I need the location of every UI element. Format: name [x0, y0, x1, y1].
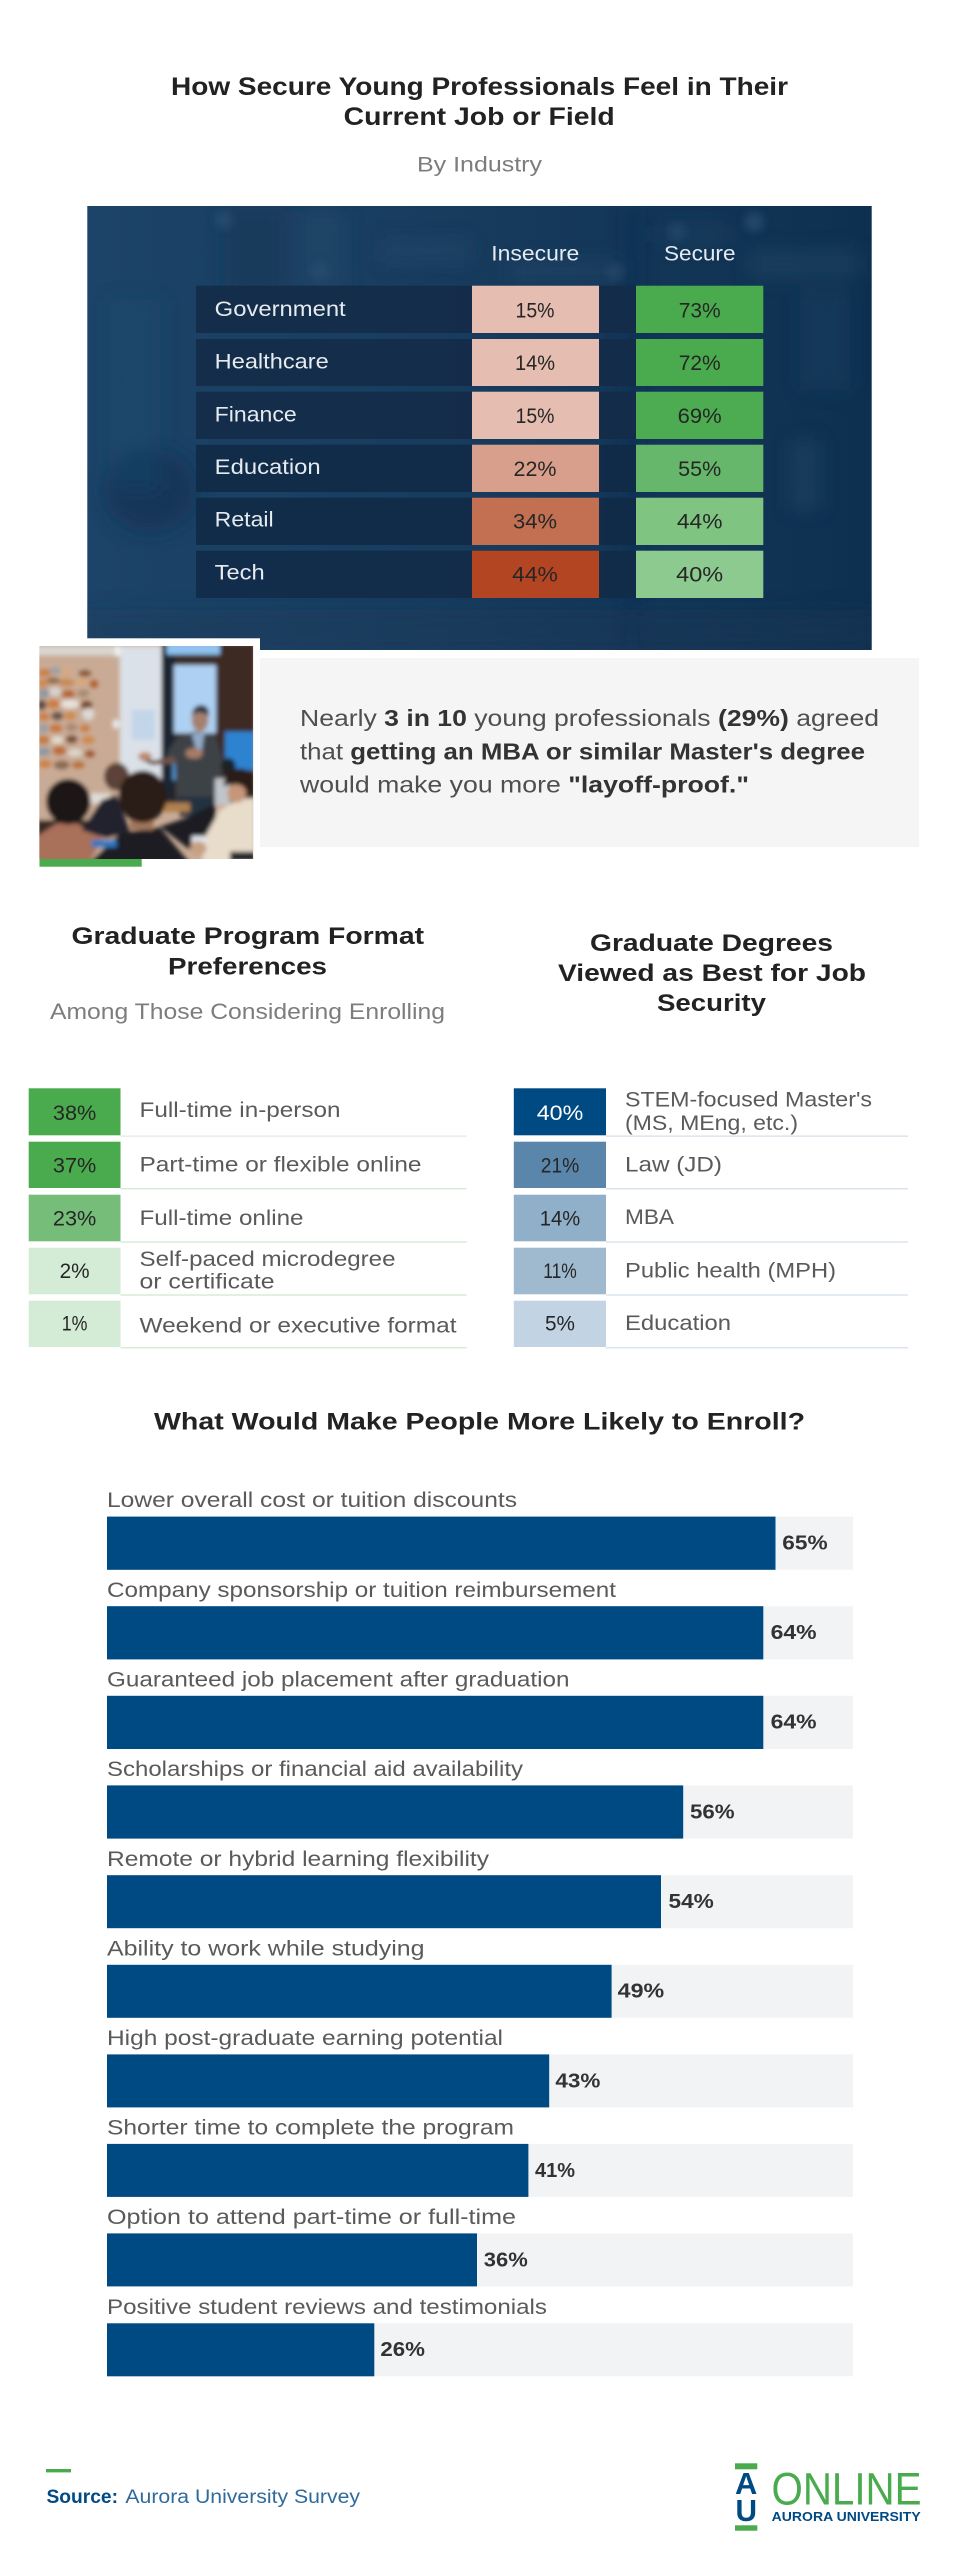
row: tech: Tech: [215, 561, 265, 584]
bar: earning potential 43%: High post-graduate earning potential: [107, 2027, 503, 2050]
bar: scholarships 56%: [107, 1758, 853, 1839]
bar: student reviews 26%: Positive student reviews and testimonials: [107, 2296, 547, 2319]
subtitle: among those considering enrolling: Among Those Considering Enrolling: [50, 999, 445, 1024]
item: mba 14%: MBA: [625, 1206, 674, 1229]
heading: graduate program format preferences: Preferences: [168, 954, 327, 981]
heading: graduate degrees best for job security: [558, 930, 866, 1017]
row: government: [196, 286, 763, 333]
bar: part-time or full-time 36%: Option to attend part-time or full-time: [107, 2206, 516, 2229]
bar: shorter time 41%: 41%: [535, 2160, 575, 2182]
bar chart: enrollment motivators: [107, 1489, 853, 2376]
row: government: 73%: [679, 299, 721, 322]
row: finance: Finance: [215, 403, 297, 426]
heading: job security by industry: [171, 73, 788, 131]
collage wall: [37, 667, 119, 770]
row: retail: 44%: [677, 511, 722, 534]
bar: student reviews 26%: 26%: [380, 2339, 425, 2361]
item: self-paced microdegree 2%: Self-paced microdegree: [140, 1248, 396, 1271]
bar: guaranteed job placement 64%: [107, 1669, 853, 1749]
bar: lower cost 65%: [107, 1489, 853, 1570]
bar: company sponsorship 64%: [107, 1579, 853, 1659]
item: part-time or flexible online 37%: 37%: [53, 1155, 96, 1178]
row: healthcare: Healthcare: [215, 351, 329, 374]
heading: job security by industry: Current Job or Field: [344, 103, 615, 131]
bar: scholarships 56%: Scholarships or financial aid availability: [107, 1758, 524, 1781]
bar: remote or hybrid 54%: 54%: [668, 1891, 714, 1913]
panel: industry security table: [87, 206, 872, 650]
bar: part-time or full-time 36%: 36%: [484, 2249, 528, 2271]
row: tech: 44%: [512, 564, 558, 587]
item: full-time in-person 38%: [29, 1088, 467, 1137]
item: mba 14%: 14%: [540, 1207, 580, 1230]
item: stem-focused master's 40%: (MS, MEng, etc.): [625, 1112, 798, 1135]
bar: guaranteed job placement 64%: Guaranteed job placement after graduation: [107, 1669, 570, 1692]
row: education: 22%: [514, 458, 556, 481]
row: retail: 34%: [513, 511, 557, 534]
heading: graduate degrees best for job security: Viewed as Best for Job: [558, 960, 866, 987]
row: retail: Retail: [215, 509, 274, 532]
item: stem-focused master's 40%: STEM-focused Master's: [625, 1089, 872, 1112]
row: tech: 40%: [676, 564, 723, 587]
callout: layoff-proof stat: that getting an MBA or similar Master's degree: [300, 738, 865, 764]
bar: earning potential 43%: 43%: [555, 2070, 601, 2092]
bar: lower cost 65%: Lower overall cost or tuition discounts: [107, 1489, 517, 1512]
row: education: [196, 445, 763, 492]
row: education: 55%: [678, 458, 721, 481]
audience: [37, 758, 255, 863]
item: public health 11%: Public health (MPH): [625, 1259, 836, 1282]
source note: Source:: [46, 2487, 118, 2508]
bar: company sponsorship 64%: 64%: [771, 1622, 817, 1644]
item: education 5%: Education: [625, 1312, 731, 1335]
callout: layoff-proof stat: would make you more "layoff-proof.": [299, 772, 749, 798]
bar: guaranteed job placement 64%: 64%: [771, 1712, 817, 1734]
logo: Aurora University Online: ONLINE: [772, 2463, 922, 2514]
item: stem-focused master's 40%: [514, 1088, 908, 1137]
logo: Aurora University Online: [735, 2463, 922, 2531]
item: self-paced microdegree 2%: [29, 1248, 467, 1296]
item: law 21%: [514, 1142, 908, 1190]
bar: scholarships 56%: 56%: [690, 1801, 735, 1823]
logo: Aurora University Online: U: [736, 2493, 757, 2528]
item: full-time online 23%: Full-time online: [140, 1207, 304, 1230]
item: self-paced microdegree 2%: 2%: [60, 1260, 90, 1283]
item: education 5%: 5%: [545, 1313, 575, 1336]
row: finance: [196, 392, 763, 439]
row: government: 15%: [516, 299, 554, 322]
item: self-paced microdegree 2%: or certificate: [140, 1270, 274, 1293]
row: finance: 69%: [678, 405, 722, 428]
bar: remote or hybrid 54%: Remote or hybrid learning flexibility: [107, 1848, 490, 1871]
list: graduate program format preferences: [29, 1088, 467, 1348]
bar: lower cost 65%: 65%: [782, 1532, 828, 1554]
subtitle: by industry: By Industry: [417, 152, 542, 176]
table column headers: Secure: [664, 243, 736, 266]
bar: student reviews 26%: [107, 2296, 853, 2376]
row: government: Government: [215, 298, 346, 321]
row: finance: 15%: [516, 405, 554, 428]
item: part-time or flexible online 37%: Part-time or flexible online: [140, 1154, 422, 1177]
callout: layoff-proof stat: Nearly 3 in 10 young professionals (29%) agreed: [300, 705, 879, 731]
row: retail: [196, 498, 763, 545]
row: tech: [196, 551, 763, 598]
bar: work while studying 49%: 49%: [618, 1980, 664, 2002]
item: full-time in-person 38%: Full-time in-person: [140, 1099, 340, 1122]
bar: shorter time 41%: Shorter time to complete the program: [107, 2117, 514, 2140]
item: weekend or executive format 1%: Weekend or executive format: [140, 1315, 457, 1338]
bar: part-time or full-time 36%: [107, 2206, 853, 2286]
list: graduate degrees viewed as best: [514, 1088, 908, 1348]
bar: work while studying 49%: Ability to work while studying: [107, 1938, 424, 1961]
bar: shorter time 41%: [107, 2117, 853, 2197]
heading: graduate degrees best for job security: Graduate Degrees: [590, 930, 833, 957]
item: mba 14%: [514, 1195, 908, 1243]
item: full-time online 23%: [29, 1195, 467, 1243]
item: stem-focused master's 40%: 40%: [537, 1102, 583, 1125]
logo: Aurora University Online: AURORA UNIVERSITY: [772, 2509, 921, 2524]
bar: work while studying 49%: [107, 1938, 853, 2018]
heading: what would make people more likely to enroll: What Would Make People More Likely to Enroll?: [154, 1409, 805, 1436]
table column headers: Insecure: [491, 243, 579, 266]
item: public health 11%: 11%: [543, 1260, 577, 1283]
item: public health 11%: [514, 1248, 908, 1296]
item: law 21%: Law (JD): [625, 1154, 722, 1177]
presenter: [138, 705, 223, 817]
source note: Aurora University Survey: [125, 2487, 361, 2508]
heading: job security by industry: How Secure Young Professionals Feel in Their: [171, 73, 788, 101]
row: healthcare: 14%: [515, 352, 555, 375]
item: weekend or executive format 1%: [29, 1301, 467, 1348]
heading: graduate degrees best for job security: Security: [657, 990, 767, 1017]
callout: layoff-proof stat: [260, 658, 919, 847]
source note: [46, 2469, 361, 2508]
bar: remote or hybrid 54%: [107, 1848, 853, 1928]
bar: company sponsorship 64%: Company sponsorship or tuition reimbursement: [107, 1579, 616, 1602]
row: healthcare: [196, 339, 763, 386]
table column headers: [491, 243, 736, 266]
heading: graduate program format preferences: [72, 923, 424, 981]
bar: earning potential 43%: [107, 2027, 853, 2107]
row: education: Education: [215, 456, 321, 479]
heading: graduate program format preferences: Graduate Program Format: [72, 923, 424, 950]
item: full-time in-person 38%: 38%: [53, 1102, 96, 1125]
item: weekend or executive format 1%: 1%: [62, 1313, 87, 1336]
item: full-time online 23%: 23%: [53, 1207, 96, 1230]
photo: presenter speaking to seated audience: [39, 638, 260, 867]
logo: Aurora University Online: A: [735, 2466, 757, 2501]
item: education 5%: [514, 1301, 908, 1348]
item: part-time or flexible online 37%: [29, 1142, 467, 1190]
row: healthcare: 72%: [679, 352, 721, 375]
item: law 21%: 21%: [541, 1155, 579, 1178]
